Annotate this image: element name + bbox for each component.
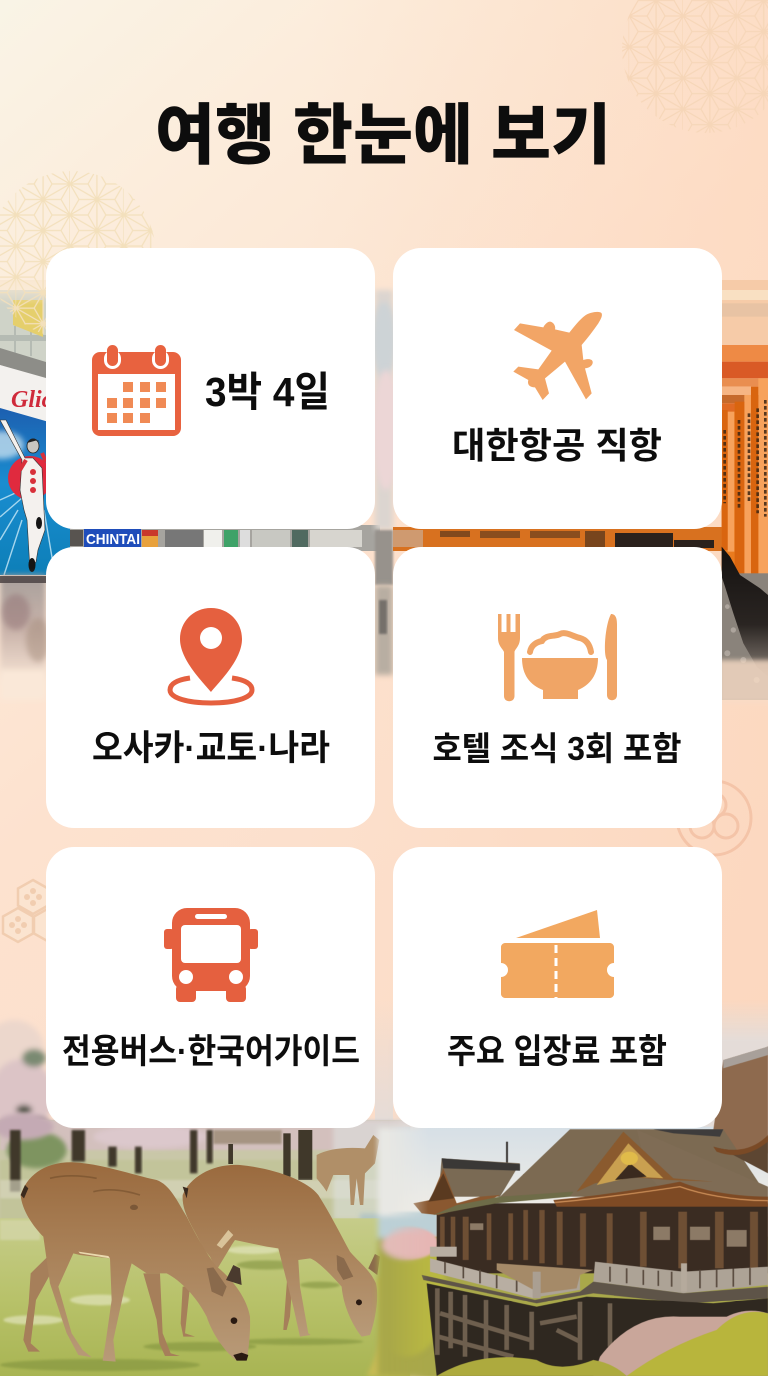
text: Korean Air direct: 대한항공 직항 bbox=[452, 425, 662, 466]
photo: haze and foliage bridging the deer and the temple bbox=[378, 1128, 438, 1376]
panel: destinations bbox=[46, 547, 375, 828]
text: Osaka Kyoto Nara: 오사카·교토·나라 bbox=[92, 729, 330, 768]
photo: street strip between top cards bbox=[70, 525, 380, 551]
pattern: family crest on the right bbox=[677, 781, 751, 855]
photo: torii strip between right cards bbox=[393, 527, 738, 551]
panel: direct flight bbox=[393, 248, 722, 529]
photo: Fushimi Inari torii gates on the right bbox=[718, 280, 768, 703]
icon: fork, rice bowl and knife bbox=[498, 614, 617, 701]
pattern: asanoha medallion left bbox=[0, 171, 156, 339]
panel: breakfast bbox=[393, 547, 722, 828]
icon: bus bbox=[164, 908, 258, 1002]
icon: calendar bbox=[92, 345, 181, 436]
photo: Nara park deer bbox=[0, 1113, 410, 1376]
panel: trip length bbox=[46, 248, 375, 529]
first deer bbox=[21, 1162, 250, 1362]
text: main admissions included: 주요 입장료 포함 bbox=[447, 1033, 667, 1071]
panel: private bus and guide bbox=[46, 847, 375, 1128]
photo: blended centre column bbox=[372, 290, 399, 1128]
text: 3 hotel breakfasts included: 호텔 조식 3회 포함 bbox=[432, 730, 682, 767]
photo: Osaka Dotonbori signs on the left: Glico bbox=[11, 387, 64, 413]
panel: admission fees bbox=[393, 847, 722, 1128]
photo: Kiyomizu-dera temple bbox=[367, 1040, 768, 1376]
photo: cherry blossoms left edge bbox=[0, 1020, 54, 1131]
small deer in the distance bbox=[317, 1135, 379, 1205]
second deer bbox=[181, 1165, 380, 1337]
photo: Osaka Dotonbori signs on the left bbox=[0, 280, 76, 700]
pattern: hexagons on the left bbox=[3, 880, 64, 942]
icon: airplane bbox=[513, 312, 602, 400]
photo: street strip between top cards: CHINTAI bbox=[86, 531, 140, 548]
text: private bus and Korean guide: 전용버스·한국어가이드 bbox=[62, 1033, 360, 1071]
photo: haze above the temple roof bbox=[722, 1000, 768, 1041]
icon: map pin bbox=[170, 608, 252, 703]
icon: ticket bbox=[501, 910, 614, 998]
pattern: asanoha medallion top right bbox=[622, 0, 768, 133]
text: 3 nights 4 days: 3박 4일 bbox=[205, 369, 330, 415]
title: 여행 한눈에 보기 bbox=[155, 98, 611, 172]
